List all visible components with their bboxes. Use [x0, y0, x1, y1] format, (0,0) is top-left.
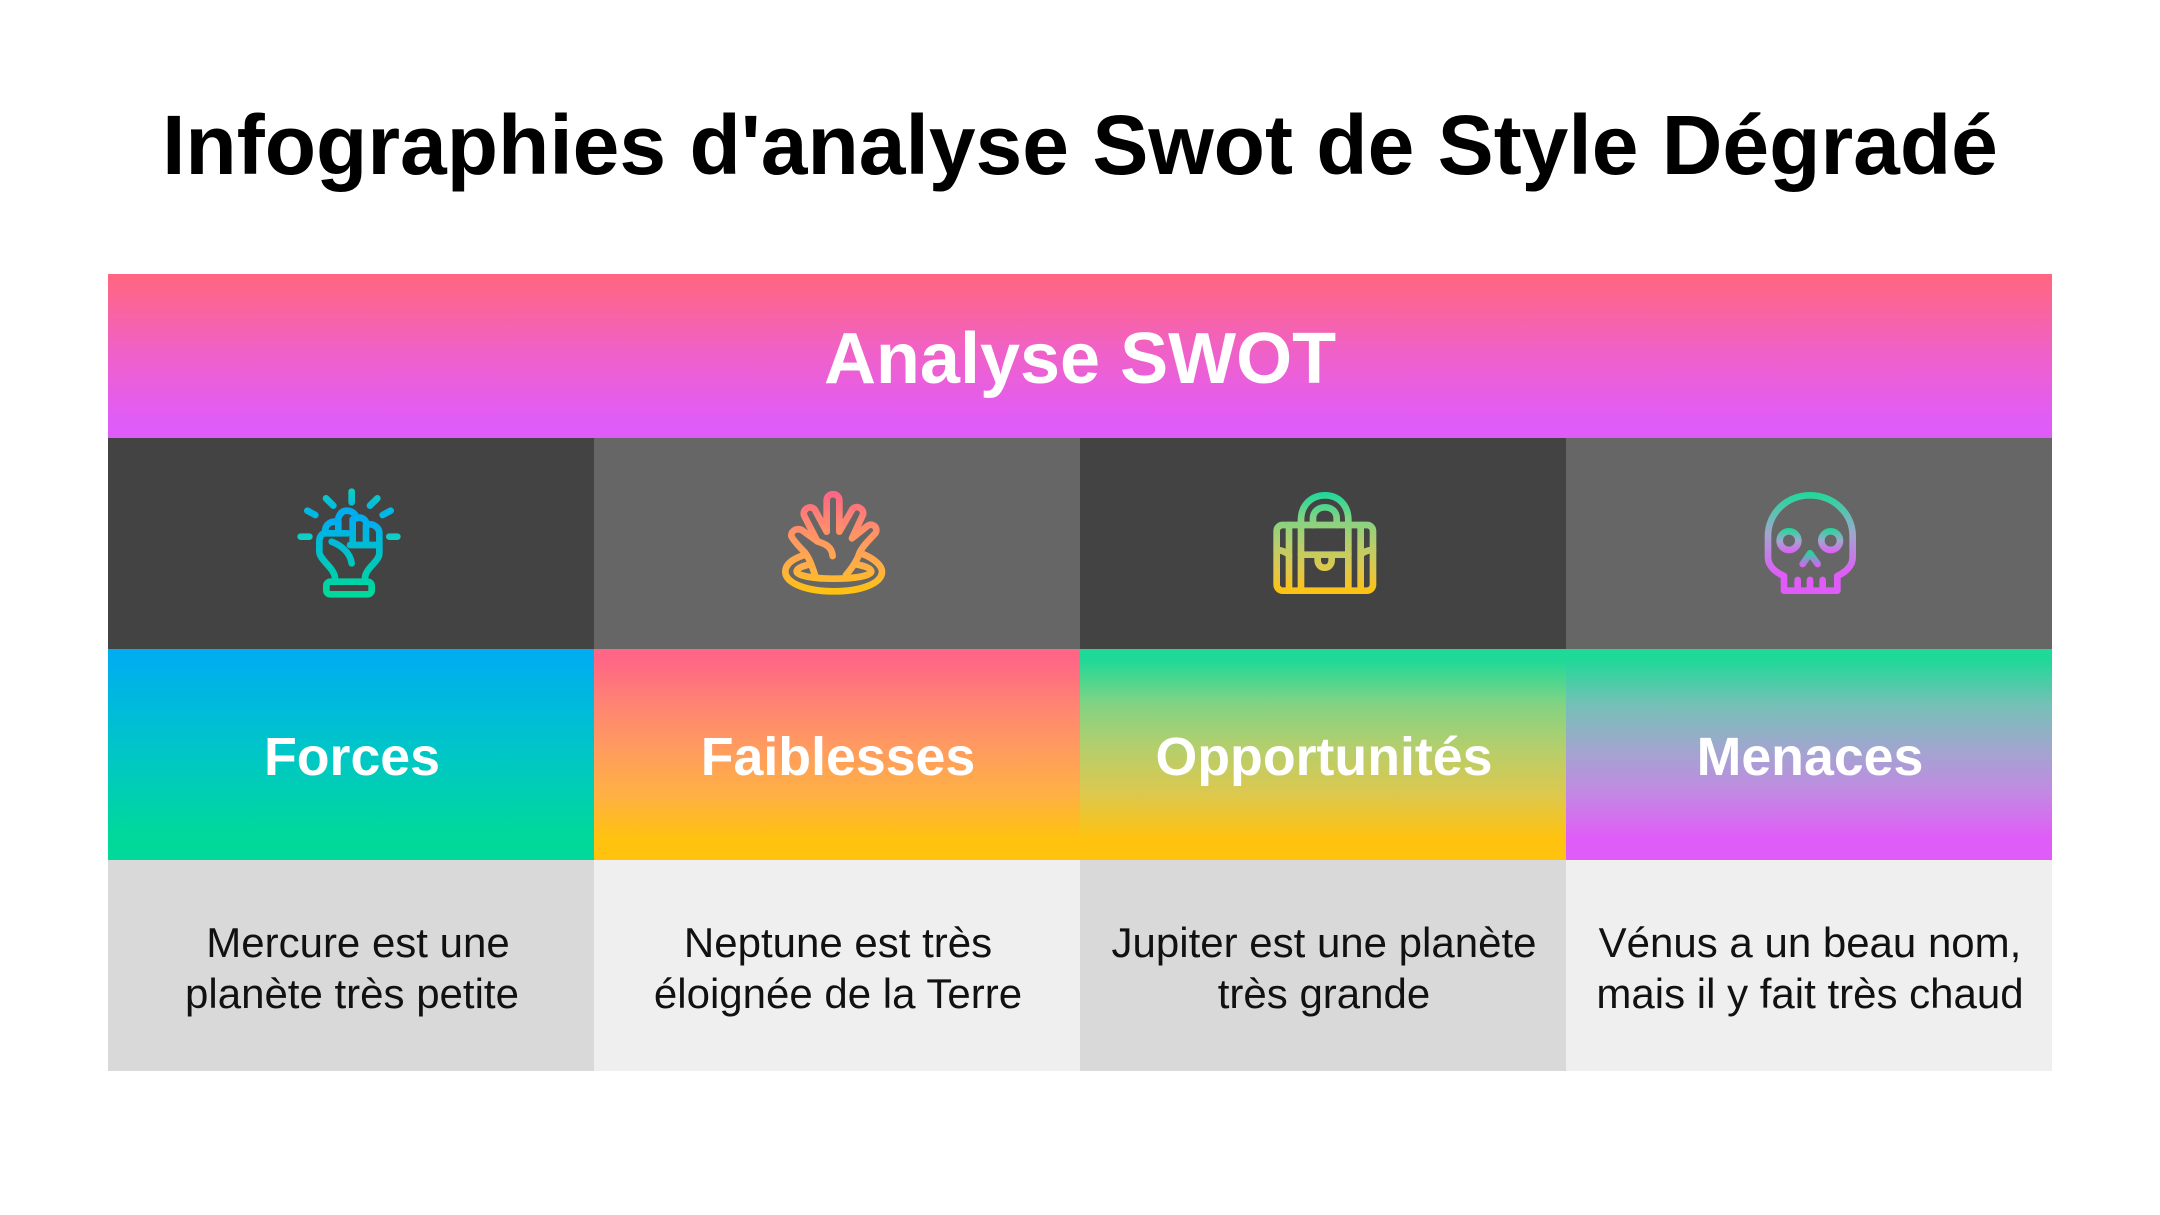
- hand: [791, 494, 876, 575]
- skull outline: [1768, 495, 1853, 591]
- fist base: [326, 582, 372, 594]
- heading panel: Menaces: Menaces: [1697, 727, 1923, 787]
- heading panel: Opportunités: Opportunités: [1155, 727, 1492, 787]
- pool rings: [785, 554, 882, 591]
- heading panel: Faiblesses: [594, 649, 1080, 860]
- heading panel: Opportunités: [1080, 649, 1566, 860]
- icon: raised fist: [301, 492, 397, 594]
- icon cell: Faiblesses: [594, 438, 1080, 649]
- description: Menaces: mais il y fait très chaud: [1596, 970, 2024, 1017]
- heading panel: Forces: Forces: [264, 727, 440, 787]
- clasp: [1318, 555, 1332, 568]
- icon cell: Forces: [108, 438, 594, 649]
- description: Faiblesses: éloignée de la Terre: [654, 970, 1022, 1017]
- case body: [1277, 525, 1373, 591]
- title: Infographies d'analyse Swot de Style Dégradé: [162, 98, 1998, 192]
- teeth: [1798, 580, 1823, 591]
- heading panel: Forces: [108, 649, 594, 860]
- icon: skull: [1768, 495, 1853, 591]
- description: Opportunités: très grande: [1218, 970, 1430, 1017]
- fist outline: [319, 511, 379, 578]
- icon: drowning hand: [785, 494, 882, 591]
- description: Forces: [108, 860, 594, 1071]
- banner: Analyse SWOT: [108, 274, 2052, 438]
- eyes: [1780, 531, 1840, 550]
- description: Menaces: Vénus a un beau nom,: [1599, 919, 2021, 966]
- description: Faiblesses: [594, 860, 1080, 1071]
- description: Opportunités: Jupiter est une planète: [1112, 919, 1536, 966]
- description: Opportunités: [1080, 860, 1566, 1071]
- nose: [1803, 553, 1818, 564]
- fingers and thumb: [325, 519, 379, 563]
- icon cell: Opportunités: [1080, 438, 1566, 649]
- heading panel: Menaces: [1566, 649, 2052, 860]
- fist rays: [301, 492, 397, 537]
- description: Forces: Mercure est une: [206, 919, 510, 966]
- handle: [1301, 495, 1348, 525]
- heading panel: Faiblesses: Faiblesses: [701, 727, 975, 787]
- description: Menaces: [1566, 860, 2052, 1071]
- description: Forces: planète très petite: [185, 970, 519, 1017]
- description: Faiblesses: Neptune est très: [684, 919, 992, 966]
- straps: [1289, 525, 1361, 591]
- icon: briefcase: [1277, 495, 1373, 591]
- side corners: [1277, 550, 1373, 556]
- icon cell: Menaces: [1566, 438, 2052, 649]
- banner heading: Analyse SWOT: [824, 319, 1336, 399]
